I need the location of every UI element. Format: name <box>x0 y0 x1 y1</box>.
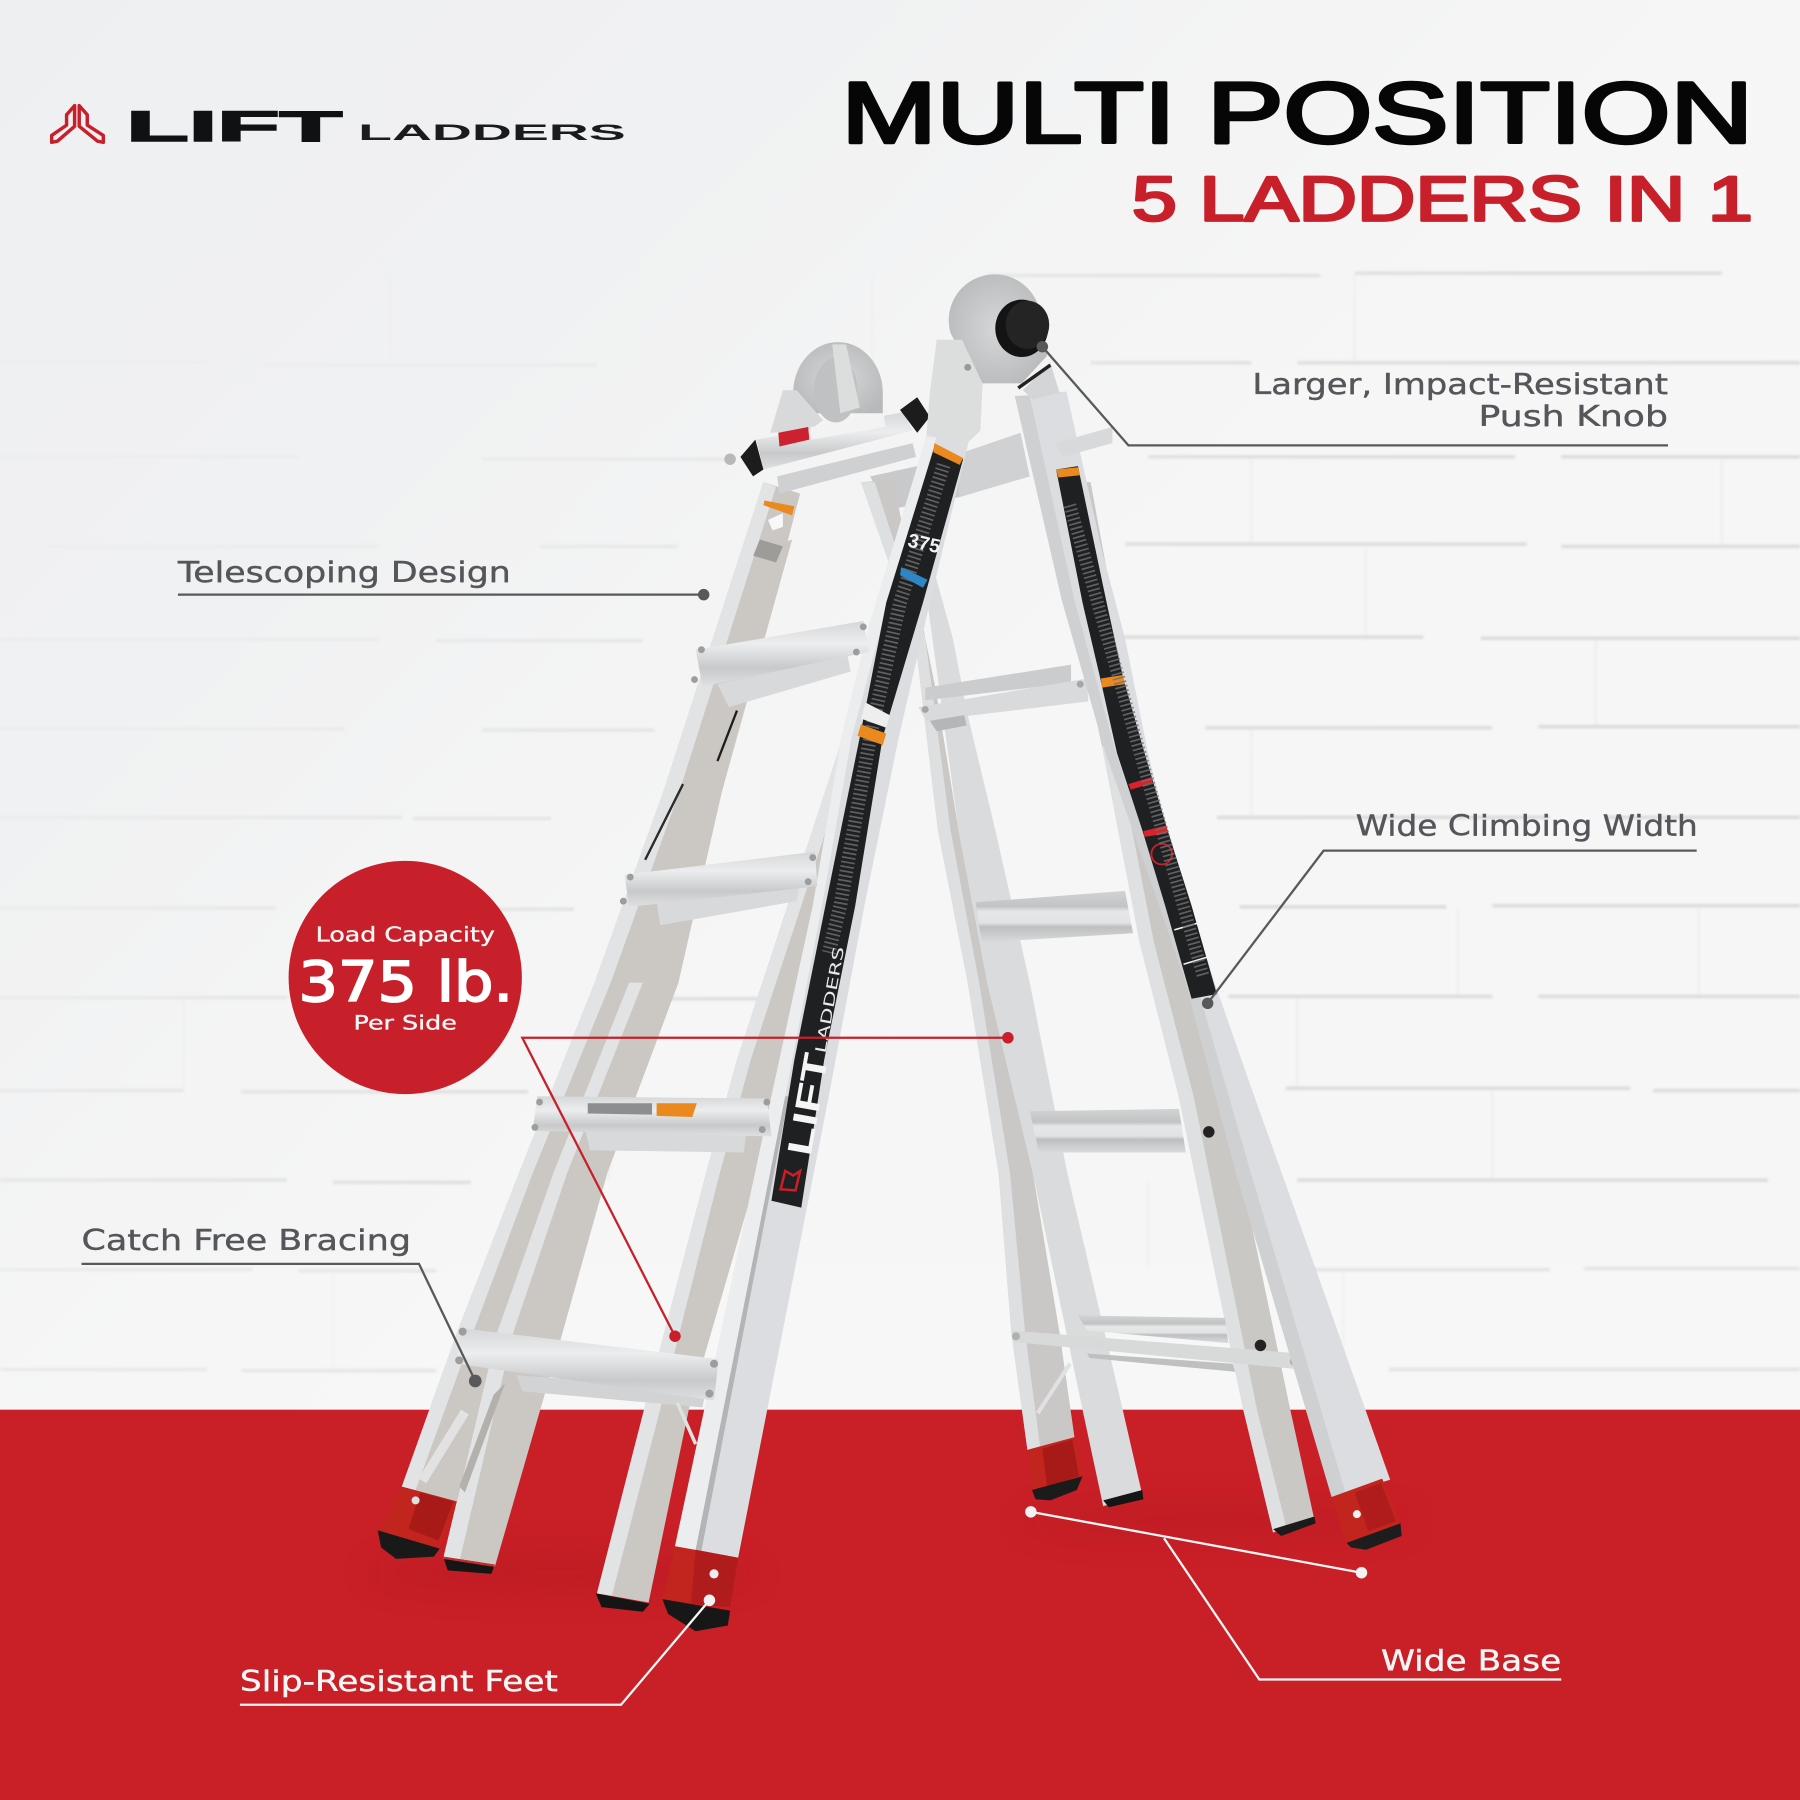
ladder <box>378 274 1402 1631</box>
callout: telescoping design <box>177 555 709 600</box>
brick wall background <box>0 0 1800 1412</box>
back right inner rail <box>1045 482 1316 1536</box>
front rungs <box>455 621 869 1444</box>
black instruction label with branding: LIFT <box>781 1050 836 1159</box>
callout: push knob <box>1037 341 1668 445</box>
callout: slip-resistant feet <box>240 1595 715 1705</box>
logo subtitle: LADDERS <box>358 120 626 145</box>
callout text: Catch Free Bracing <box>82 1223 411 1257</box>
main front rail <box>675 436 970 1558</box>
main front foot <box>662 1546 738 1631</box>
back left rail 1 <box>861 480 1074 1450</box>
title: MULTI POSITION <box>841 65 1753 161</box>
icon: logo mark <box>52 106 103 142</box>
top platform <box>724 397 930 494</box>
instruction label, back rail <box>1056 466 1217 999</box>
callout: push knob: Push Knob <box>1479 399 1668 433</box>
callout text: Slip-Resistant Feet <box>240 1664 558 1698</box>
black instruction label with branding: LADDERS <box>812 945 848 1055</box>
back left foot <box>1027 1437 1083 1500</box>
callout text: Telescoping Design <box>177 555 511 589</box>
right hinge with push knob <box>926 274 1060 441</box>
back horizontal top bars <box>870 433 1030 510</box>
callout: catch free bracing <box>82 1223 482 1387</box>
left warning sticker <box>753 501 794 562</box>
logo: Lift Ladders <box>52 103 626 150</box>
black instruction label with branding <box>771 443 963 1208</box>
left outer rail <box>402 482 800 1502</box>
callout: wide base <box>1025 1506 1561 1679</box>
back rail knob bracket <box>1055 427 1112 457</box>
callout text: Larger, Impact-Resistant <box>1252 367 1668 401</box>
back rungs <box>918 665 1302 1413</box>
logo wordmark: LIFT <box>126 103 342 150</box>
front ladder section <box>378 274 1060 1631</box>
left inner rail <box>443 540 792 1574</box>
back right front rail <box>1015 391 1390 1497</box>
icon: black push knob <box>995 300 1049 357</box>
back left rail 2 <box>913 494 1143 1507</box>
left hinge <box>770 342 883 433</box>
badge circle <box>289 861 522 1094</box>
back right foot <box>1332 1479 1402 1550</box>
callout text: Wide Base <box>1381 1643 1561 1677</box>
badge label: Load Capacity <box>316 922 495 946</box>
callout: load capacity <box>289 861 1014 1342</box>
right inner rail <box>596 735 882 1612</box>
badge value: 375 lb. <box>298 950 513 1014</box>
black instruction label with branding: 375 <box>906 530 942 558</box>
red floor <box>0 1410 1800 1800</box>
callout: wide climbing width <box>1202 809 1698 1009</box>
badge unit: Per Side <box>354 1012 457 1035</box>
back ladder section <box>861 391 1402 1550</box>
subtitle: 5 LADDERS IN 1 <box>1132 164 1753 234</box>
left front foot <box>378 1487 457 1559</box>
callout text: Wide Climbing Width <box>1356 809 1698 843</box>
